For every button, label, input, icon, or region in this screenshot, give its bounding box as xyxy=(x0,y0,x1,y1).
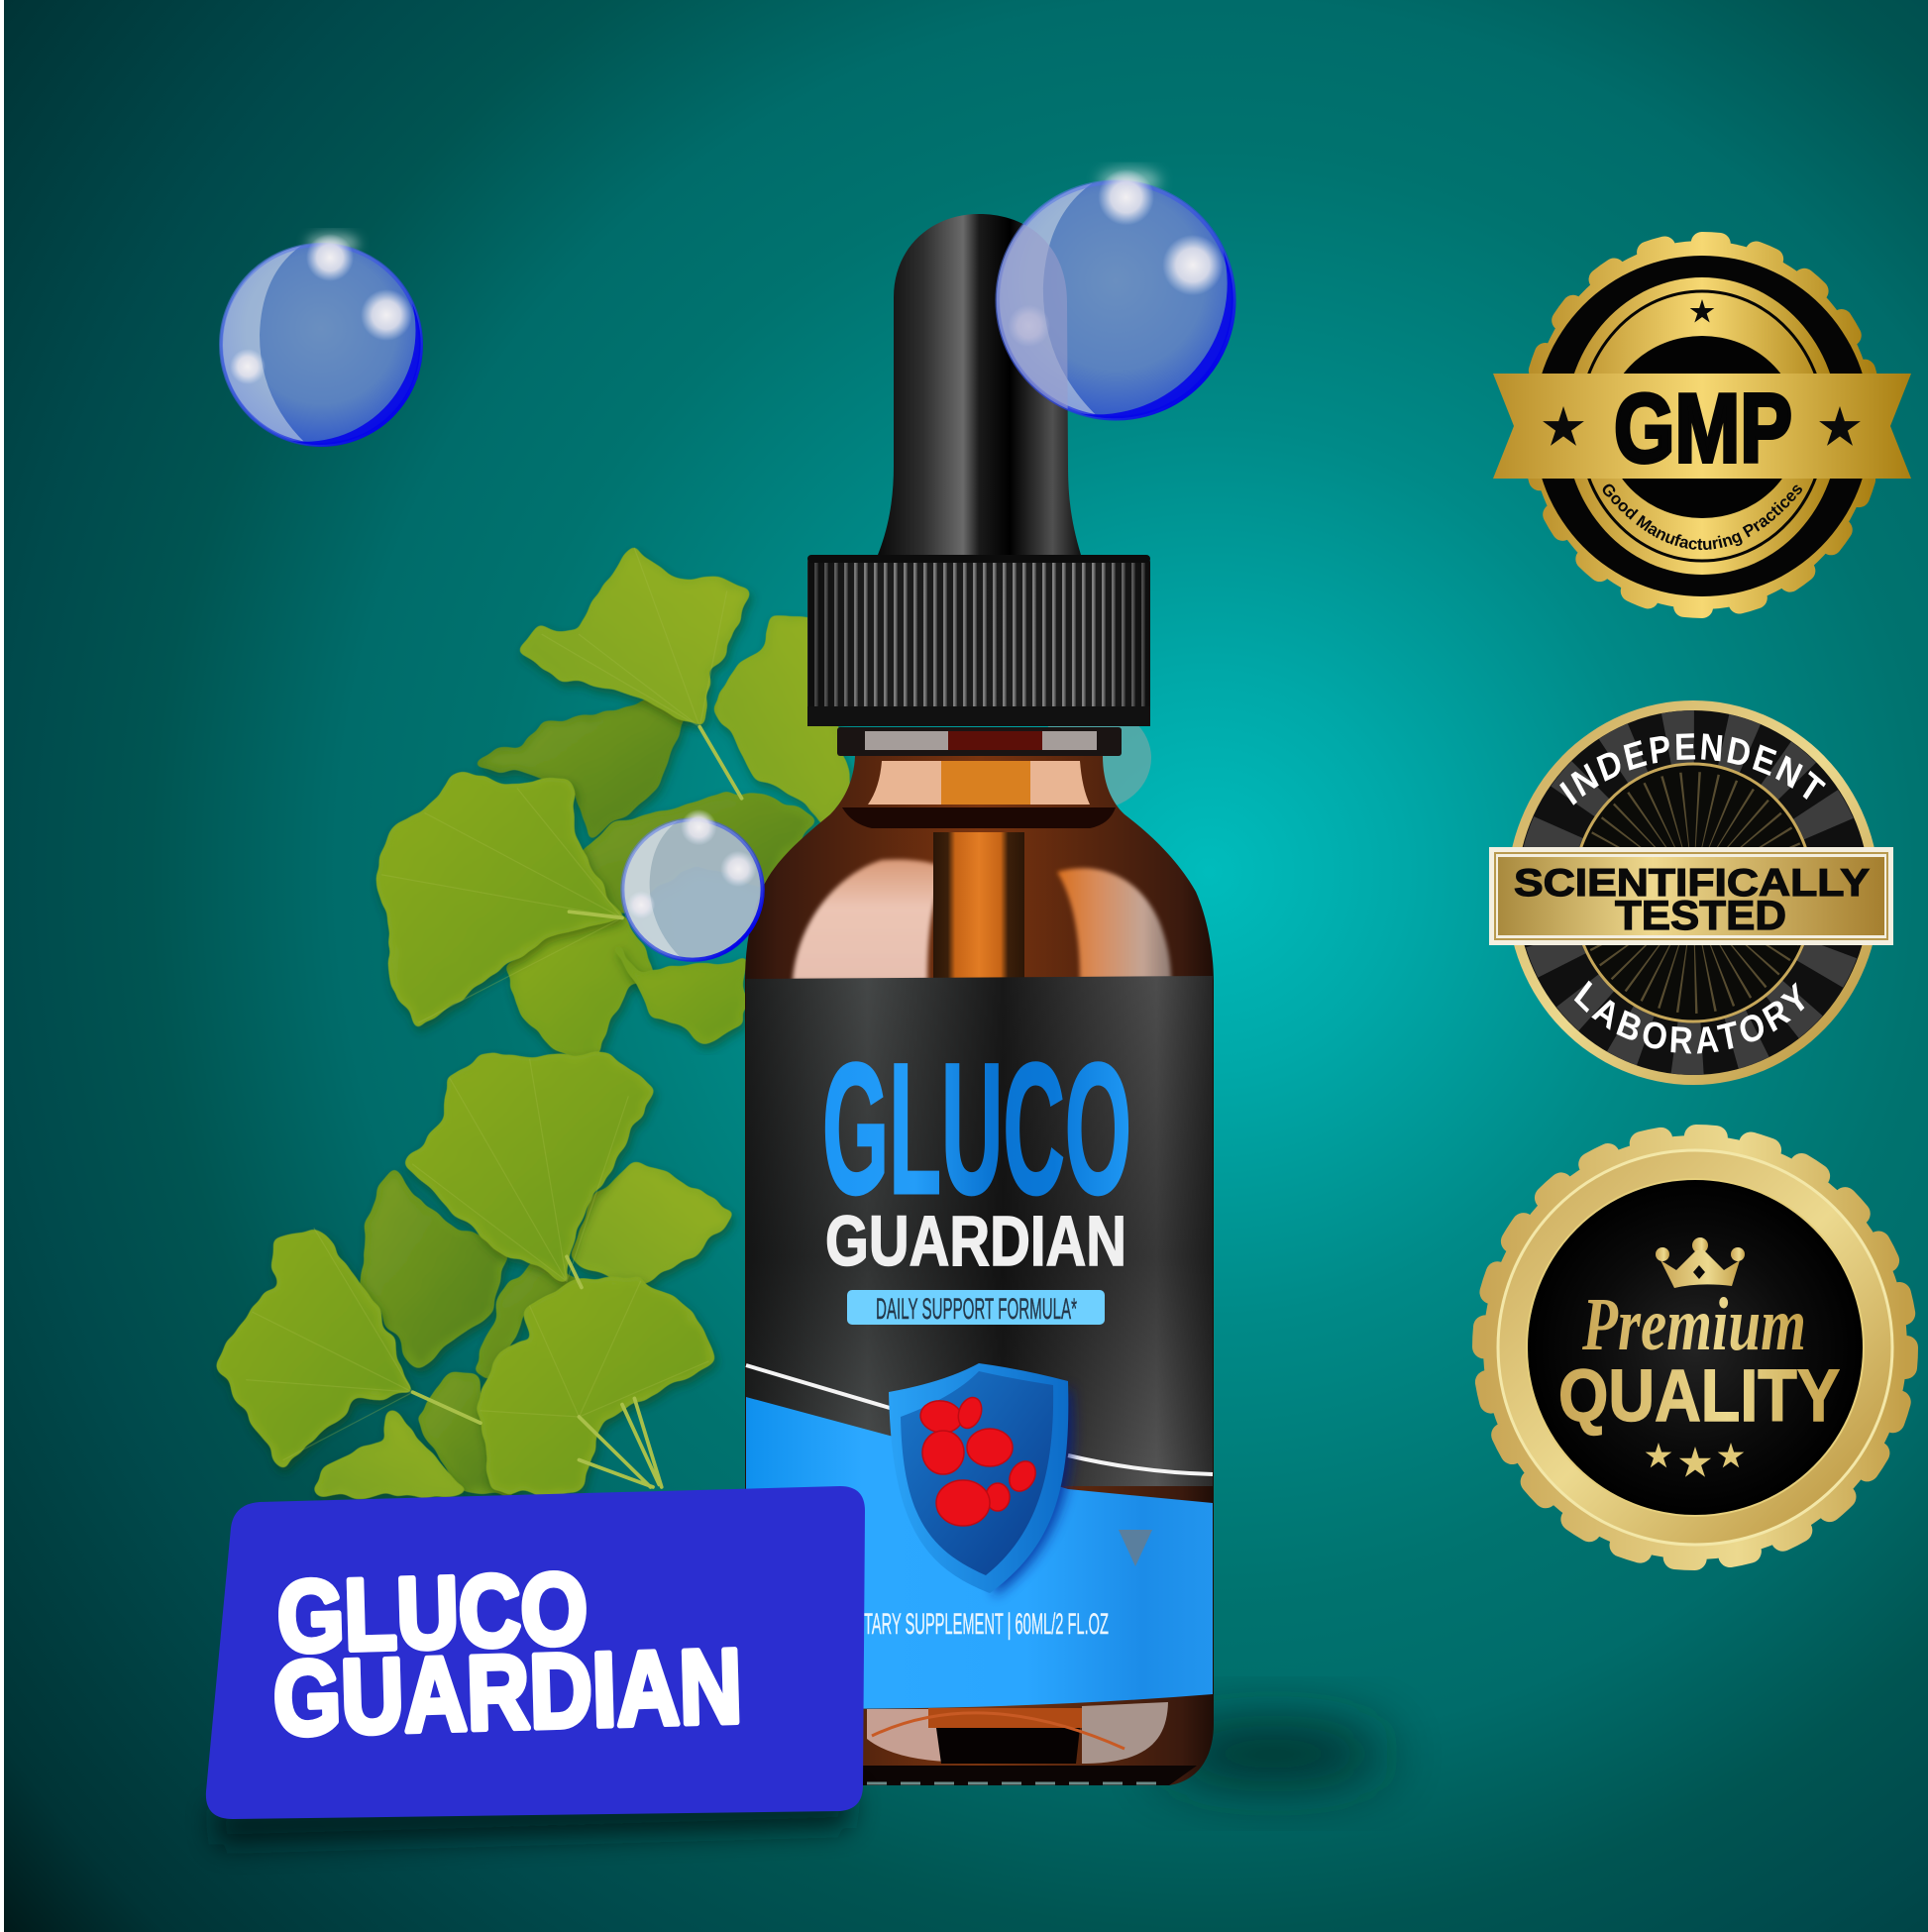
lab ribbon xyxy=(1489,847,1893,945)
leaf: big left xyxy=(379,774,622,1025)
lab sunburst xyxy=(1636,831,1751,954)
label: formula pill xyxy=(847,1290,1105,1326)
premium script: Premium xyxy=(1581,1283,1806,1366)
dropper bottle: GLUCO xyxy=(822,1024,1131,1233)
ginkgo leaves xyxy=(219,548,850,1493)
label: formula pill: DAILY SUPPORT FORMULA* xyxy=(876,1293,1077,1326)
leaf: bottom stub xyxy=(419,1374,511,1493)
collar xyxy=(837,727,1122,756)
bottle ground shadow xyxy=(1159,1724,1387,1783)
card title: GLUCO xyxy=(275,1552,589,1673)
lab curved captions xyxy=(1559,733,1826,1054)
leaf: behind top right xyxy=(714,616,850,819)
neck highlights xyxy=(868,761,1090,805)
badge: GMP xyxy=(1493,232,1911,618)
leaf: behind bubble xyxy=(573,795,813,912)
label: GUARDIAN: GUARDIAN xyxy=(825,1203,1126,1281)
lab ribbon text xyxy=(1514,862,1870,938)
premium scalloped seal xyxy=(1483,1135,1907,1559)
rubber bulb xyxy=(878,214,1081,555)
quality word: QUALITY xyxy=(1558,1354,1840,1437)
GMP text: GMP xyxy=(1614,374,1792,483)
GMP curved caption: Good Manufacturing Practices xyxy=(1603,483,1802,551)
lab curved captions: INDEPENDENT xyxy=(1559,733,1826,805)
card shadow xyxy=(213,1793,854,1845)
leaf: lower right xyxy=(573,1164,730,1287)
bottle glass body xyxy=(745,756,1214,1785)
bubble: over dropper xyxy=(997,169,1234,419)
badge: premium quality xyxy=(1483,1135,1907,1559)
leaf: middle dark xyxy=(364,1170,505,1367)
GMP ribbon xyxy=(1493,374,1911,479)
dropper stem xyxy=(933,832,1024,981)
faint bubble behind bottle neck xyxy=(1036,706,1151,809)
lab curved captions: LABORATORY xyxy=(1573,981,1805,1054)
red blood cells xyxy=(918,1394,1040,1526)
leaf: right of small bubble xyxy=(618,948,745,1041)
bubble: top left xyxy=(220,234,422,446)
dropper bottle: TARY SUPPLEMENT | 60ML/2 FL.OZ xyxy=(864,1608,1109,1641)
label blue panel xyxy=(746,1397,1213,1709)
card title xyxy=(271,1552,743,1758)
leaf: bottom left stub xyxy=(317,1411,462,1493)
label: brand logo xyxy=(1119,1530,1152,1566)
leaf: under the large one xyxy=(511,917,653,1059)
lab ribbon text: TESTED xyxy=(1615,892,1786,938)
premium crown xyxy=(1656,1237,1745,1288)
leaf: front bottom right xyxy=(478,1281,714,1491)
leaf: small centre xyxy=(475,1256,586,1380)
card title: GUARDIAN xyxy=(271,1628,743,1758)
label: blood shield xyxy=(889,1363,1074,1597)
leaf: dark under top xyxy=(475,702,690,838)
dropper bottle xyxy=(745,214,1214,1785)
leaf: far left xyxy=(219,1229,413,1466)
badge: scientifically tested xyxy=(1489,700,1893,1085)
bubble: over leaves xyxy=(622,809,763,960)
lab seal xyxy=(1507,700,1879,1085)
GMP stars xyxy=(1543,299,1861,446)
leaf stems and veins xyxy=(247,548,742,1487)
premium stars xyxy=(1646,1443,1744,1477)
bottle base highlights xyxy=(753,1702,1197,1785)
blue brand card xyxy=(206,1486,865,1819)
ribbed cap xyxy=(807,555,1150,726)
shoulder highlights xyxy=(793,859,1171,981)
GMP scalloped seal xyxy=(1530,241,1874,609)
lab ribbon text: SCIENTIFICALLY xyxy=(1514,862,1870,905)
bottle label dark panel xyxy=(746,976,1213,1486)
leaf: top xyxy=(520,548,749,727)
leaf: lower top xyxy=(406,1053,653,1281)
label white swoosh xyxy=(746,1365,1213,1474)
